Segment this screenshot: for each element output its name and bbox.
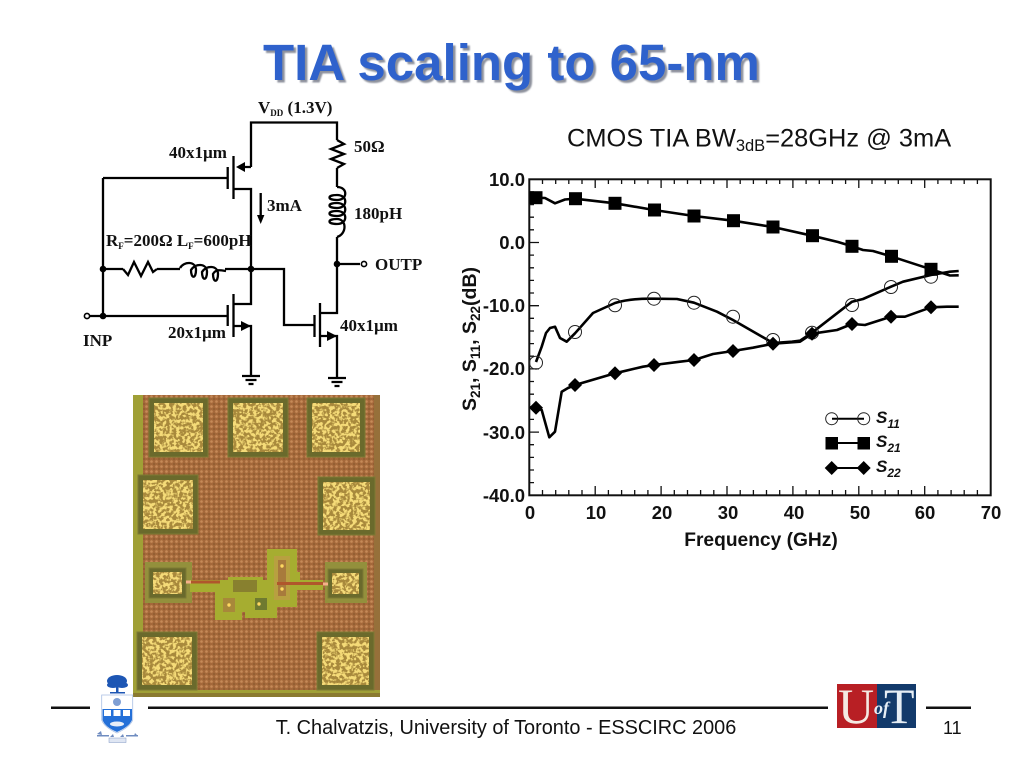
- chart subtitle: CMOS TIA BW: [567, 124, 736, 152]
- crest scroll: [97, 731, 138, 742]
- legend: S: [876, 408, 887, 427]
- x axis title: Frequency (GHz): [684, 530, 838, 551]
- circuit labels: 40x1µm: [169, 143, 227, 162]
- NMOS transistor 20x1um: [228, 294, 251, 337]
- PMOS transistor 40x1um: [228, 156, 245, 199]
- inductor LF: [180, 263, 226, 281]
- title: TIA scaling to 65-nm: [266, 36, 762, 94]
- circuit labels: INP: [83, 331, 112, 350]
- series S22: [529, 300, 959, 437]
- x axis tick labels: 70: [981, 502, 1001, 523]
- x axis tick labels: 10: [586, 502, 606, 523]
- title: TIA scaling to 65-nm: [263, 34, 760, 91]
- circuit labels: =200Ω L: [124, 231, 188, 250]
- inductor 180pH: [330, 187, 345, 237]
- crest shield: [102, 695, 133, 733]
- chart subtitle: =28GHz @ 3mA: [765, 124, 951, 152]
- legend: S: [876, 432, 887, 451]
- x axis tick labels: 30: [718, 502, 738, 523]
- circuit labels: 50Ω: [354, 137, 385, 156]
- y axis title: 11: [468, 344, 483, 359]
- circuit labels: F: [188, 241, 194, 251]
- y axis title: 21: [468, 382, 483, 398]
- circuit labels: =600pH: [194, 231, 252, 250]
- circuit labels: 20x1µm: [168, 323, 226, 342]
- TIA circuit layout: [186, 549, 328, 620]
- circuit nodes and terminals: [84, 261, 367, 319]
- circuit labels: 3mA: [267, 196, 303, 215]
- x axis tick labels: 60: [915, 502, 935, 523]
- x axis tick labels: 50: [850, 502, 870, 523]
- y axis tick labels: -40.0: [483, 485, 525, 506]
- die photograph: [133, 395, 380, 697]
- page number: 11: [943, 718, 962, 738]
- series S11: [530, 270, 959, 369]
- circuit labels: 180pH: [354, 204, 402, 223]
- resistor 50 ohm: [331, 140, 344, 168]
- crest tree: [107, 675, 128, 694]
- legend: [825, 408, 901, 480]
- x axis tick labels: 0: [525, 502, 535, 523]
- x axis tick labels: 20: [652, 502, 672, 523]
- circuit labels: V: [258, 98, 270, 117]
- legend: 21: [886, 441, 901, 455]
- x axis tick labels: 40: [784, 502, 804, 523]
- y axis tick labels: -20.0: [483, 358, 525, 379]
- circuit schematic: [83, 98, 422, 386]
- y axis tick labels: [483, 169, 525, 506]
- wires: [87, 122, 360, 378]
- footer rules: [51, 706, 971, 709]
- y axis title: (dB): [459, 267, 481, 306]
- ground symbols: [242, 376, 346, 386]
- circuit labels: [83, 98, 422, 350]
- legend: 22: [886, 466, 901, 480]
- circuit labels: F: [118, 241, 124, 251]
- series S21: [530, 191, 959, 276]
- circuit labels: R: [106, 231, 118, 250]
- circuit labels: 40x1µm: [340, 316, 398, 335]
- circuit labels: OUTP: [375, 255, 422, 274]
- y axis tick labels: -30.0: [483, 422, 525, 443]
- circuit labels: (1.3V): [283, 98, 332, 117]
- U of T logo: T: [884, 678, 915, 734]
- resistor RF: [123, 262, 157, 276]
- U of T logo: U: [838, 678, 874, 734]
- U of T logo: of: [874, 698, 891, 718]
- legend: 11: [887, 417, 900, 431]
- plot frame and ticks: [529, 179, 991, 495]
- S-parameter line chart: [459, 169, 1001, 551]
- footer citation: T. Chalvatzis, University of Toronto - ESSCIRC 2006: [276, 717, 736, 739]
- University of Toronto crest: [97, 675, 138, 742]
- legend: S: [876, 457, 887, 476]
- U of T logo: [837, 678, 916, 734]
- bond pads: [133, 395, 380, 697]
- NMOS transistor 40x1um output: [314, 303, 337, 347]
- circuit labels: DD: [270, 108, 284, 118]
- current arrow 3mA: [257, 193, 264, 224]
- y axis title: 22: [468, 306, 483, 321]
- y axis tick labels: 0.0: [499, 232, 525, 253]
- y axis tick labels: -10.0: [483, 295, 525, 316]
- x axis tick labels: [525, 502, 1001, 523]
- y axis title: , S: [459, 359, 481, 383]
- die edge metal: [133, 395, 380, 697]
- chart subtitle: 3dB: [736, 137, 765, 155]
- y axis tick labels: 10.0: [489, 169, 525, 190]
- y axis title: S: [459, 398, 481, 411]
- y axis title: , S: [459, 321, 481, 345]
